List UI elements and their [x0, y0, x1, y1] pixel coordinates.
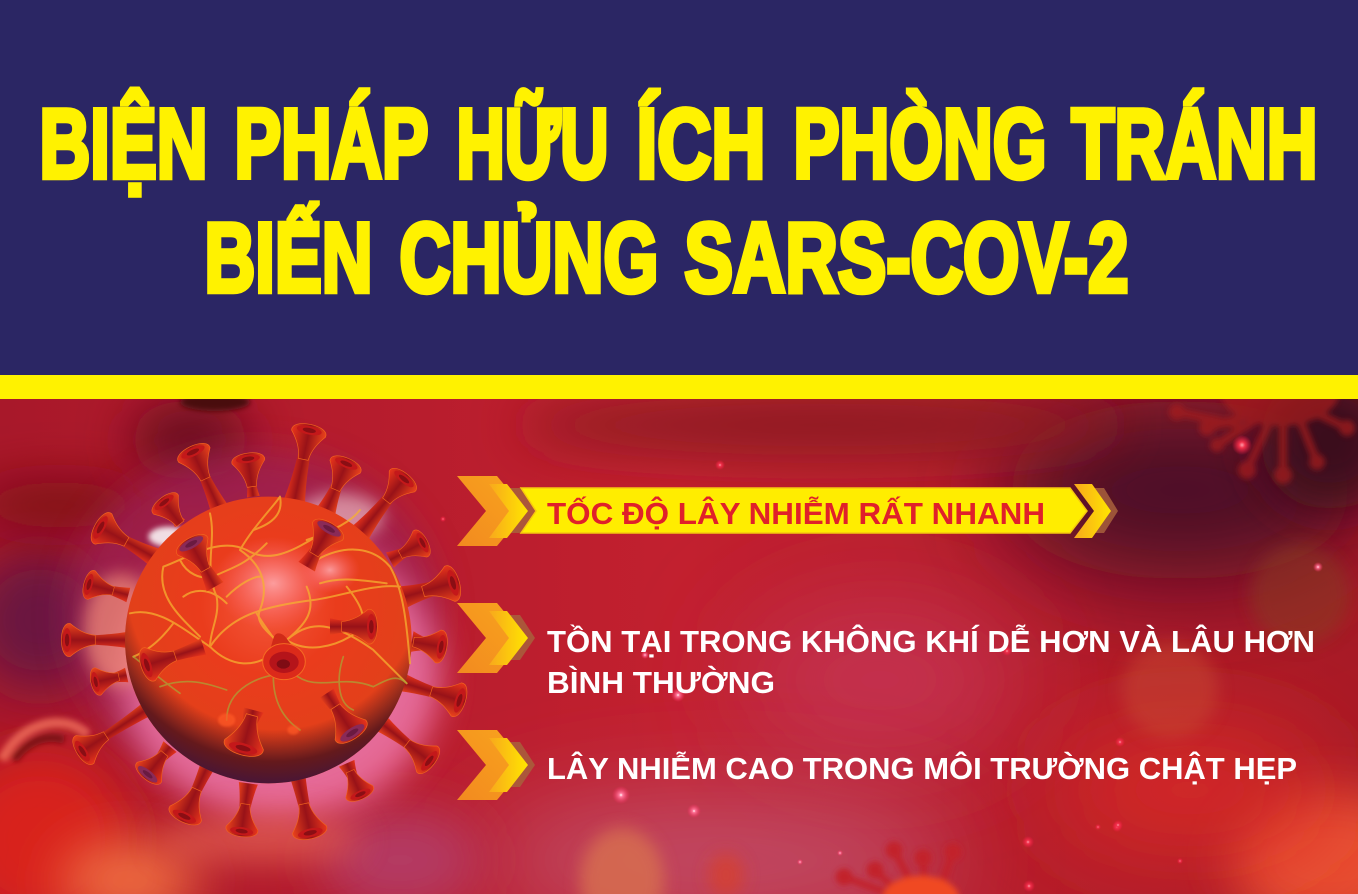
title: BIẾN	[204, 202, 372, 312]
blurred cell, left	[2, 723, 88, 760]
lower surface veins	[133, 657, 407, 730]
sparks	[440, 435, 1323, 892]
title: HỮU	[456, 88, 608, 198]
title: BIỆN	[40, 88, 208, 198]
surface spots	[218, 713, 299, 735]
surface veins	[130, 497, 410, 683]
item 2 text: BÌNH THƯỜNG	[547, 664, 775, 700]
banner text: TỐC ĐỘ LÂY NHIỄM RẤT NHANH	[547, 495, 1045, 531]
item 2 text	[547, 623, 1315, 700]
blurred virus, top right	[1168, 399, 1358, 486]
item 2 text: TỒN TẠI TRONG KHÔNG KHÍ DỄ HƠN VÀ LÂU HƠN	[547, 623, 1315, 659]
icon: arrow chevron	[457, 476, 535, 546]
title: ÍCH	[636, 88, 766, 198]
red background panel	[0, 354, 1358, 894]
title	[40, 88, 1318, 312]
icon: arrow chevron	[457, 730, 535, 800]
icon: right chevron	[1074, 484, 1118, 538]
virus glow	[67, 450, 440, 863]
title: PHÁP	[234, 88, 428, 198]
title: PHÒNG	[794, 88, 1046, 198]
front spikes	[136, 515, 377, 760]
header panel	[0, 0, 1358, 376]
blurred virus, bottom centre	[839, 845, 959, 894]
item 2	[457, 603, 1315, 700]
item 3	[457, 730, 1297, 800]
back spikes	[61, 421, 470, 842]
icon: coronavirus illustration	[61, 421, 470, 863]
icon: arrow chevron	[457, 603, 535, 673]
title: SARS-COV-2	[684, 202, 1128, 312]
item 3 text: LÂY NHIỄM CAO TRONG MÔI TRƯỜNG CHẬT HẸP	[547, 750, 1297, 786]
yellow banner	[521, 488, 1087, 533]
virus sphere body	[125, 497, 412, 783]
item 1: highlighted banner	[457, 476, 1118, 546]
title: CHỦNG	[400, 202, 658, 312]
yellow divider band	[0, 375, 1358, 399]
